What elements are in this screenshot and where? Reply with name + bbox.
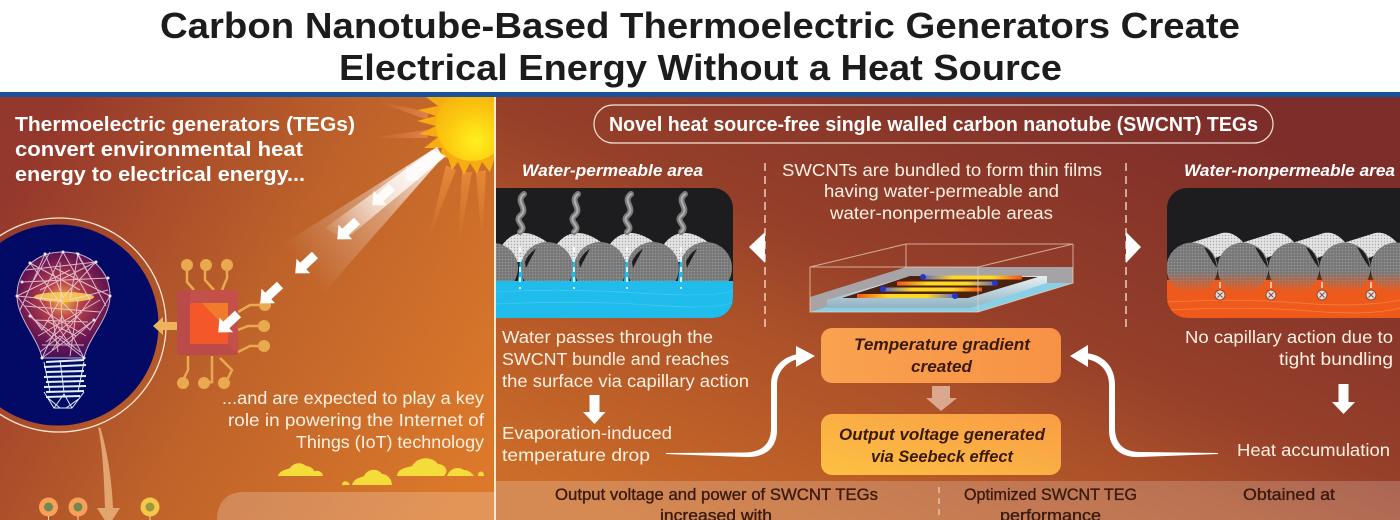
- diagram: water-nonpermeable bundle: [1166, 188, 1400, 318]
- text: IoT role: [222, 388, 484, 452]
- text: evaporation temperature drop: Evaporation-induced: [502, 423, 672, 443]
- box: output voltage generated: via Seebeck effect: [871, 447, 1014, 466]
- arrow: heat accumulation to gradient: [1070, 345, 1218, 457]
- panel divider: [494, 97, 496, 520]
- title divider bar: [0, 92, 1400, 97]
- text: SWCNT bundling: having water-permeable and: [824, 181, 1059, 201]
- text: no capillary action: [1185, 327, 1393, 369]
- icon: sun with rays: [389, 97, 494, 220]
- text: SWCNT bundling: [782, 160, 1102, 223]
- icon: light bulb in circle: [0, 218, 166, 432]
- text: water passes through: SWCNT bundle and reaches: [502, 349, 729, 369]
- title: [160, 5, 1240, 88]
- heading: TEG definition: [15, 114, 355, 186]
- text: water passes through: the surface via capillary action: [502, 371, 749, 391]
- arrow: gradient to voltage: [926, 386, 957, 411]
- panel: lower callout: [217, 492, 494, 520]
- sunbeam: [294, 147, 446, 284]
- panel: novel SWCNT TEGs: [468, 97, 1400, 520]
- text: water passes through: [502, 327, 749, 391]
- text: IoT role: role in powering the Internet of: [228, 410, 484, 430]
- arrow: toward nonpermeable area: [1126, 232, 1141, 263]
- arrows: heat flowing from sun: [218, 166, 420, 332]
- heading pill: [594, 105, 1273, 143]
- box: output voltage generated: Output voltage generated: [839, 425, 1046, 444]
- box: output voltage generated: [821, 414, 1061, 475]
- arrow: bulb to IoT devices: [97, 427, 120, 520]
- title: Carbon Nanotube-Based Thermoelectric Generators Create: [160, 5, 1240, 46]
- panel: results strip: [496, 481, 1400, 520]
- panel: TEG introduction: [0, 89, 508, 520]
- text: obtained at heading: Obtained at: [1243, 486, 1335, 504]
- text: SWCNT bundling: SWCNTs are bundled to form thin films: [782, 160, 1102, 180]
- heading: water-permeable area: Water-permeable area: [522, 161, 703, 180]
- text: IoT role: ...and are expected to play a key: [222, 388, 484, 408]
- arrow: chip to bulb: [153, 317, 177, 335]
- box: temperature gradient created: created: [911, 357, 973, 376]
- text: water passes through: Water passes through the: [502, 327, 713, 347]
- heading: TEG definition: Thermoelectric generators (TEGs): [15, 114, 355, 136]
- box: temperature gradient created: [821, 328, 1061, 383]
- diagram: water-permeable bundle: [496, 188, 733, 318]
- text: optimized performance heading: Optimized SWCNT TEG: [964, 486, 1137, 504]
- icon: thermoelectric chip: [177, 259, 271, 389]
- heading pill: Novel heat source-free single walled carbon nanotube (SWCNT) TEGs: [609, 114, 1258, 136]
- arrow: temperature drop to gradient: [666, 346, 815, 457]
- arrow: toward permeable area: [749, 232, 765, 263]
- text: optimized performance heading: [964, 486, 1137, 520]
- arrow: capillary to evaporation: [583, 395, 606, 424]
- icons: IoT devices: [39, 498, 160, 520]
- heading: water-nonpermeable area: Water-nonpermeable area: [1184, 161, 1395, 180]
- title: Electrical Energy Without a Heat Source: [339, 47, 1062, 88]
- icon: clouds: [278, 458, 484, 485]
- text: output voltage heading: [555, 486, 878, 520]
- box: temperature gradient created: Temperature gradient: [854, 335, 1031, 354]
- text: evaporation temperature drop: temperature drop: [502, 445, 650, 465]
- text: SWCNT bundling: water-nonpermeable areas: [829, 203, 1053, 223]
- arrow: capillary absence to heat accumulation: [1332, 384, 1355, 414]
- heading: TEG definition: convert environmental heat: [15, 139, 303, 161]
- text: heat accumulation: Heat accumulation: [1237, 440, 1390, 460]
- heading: TEG definition: energy to electrical energy...: [15, 164, 305, 186]
- text: no capillary action: tight bundling: [1279, 349, 1393, 369]
- diagram: SWCNT thin film: [810, 244, 1073, 312]
- text: IoT role: Things (IoT) technology: [296, 432, 484, 452]
- text: no capillary action: No capillary action due to: [1185, 327, 1393, 347]
- text: output voltage heading: Output voltage and power of SWCNT TEGs: [555, 486, 878, 504]
- text: evaporation temperature drop: [502, 423, 672, 465]
